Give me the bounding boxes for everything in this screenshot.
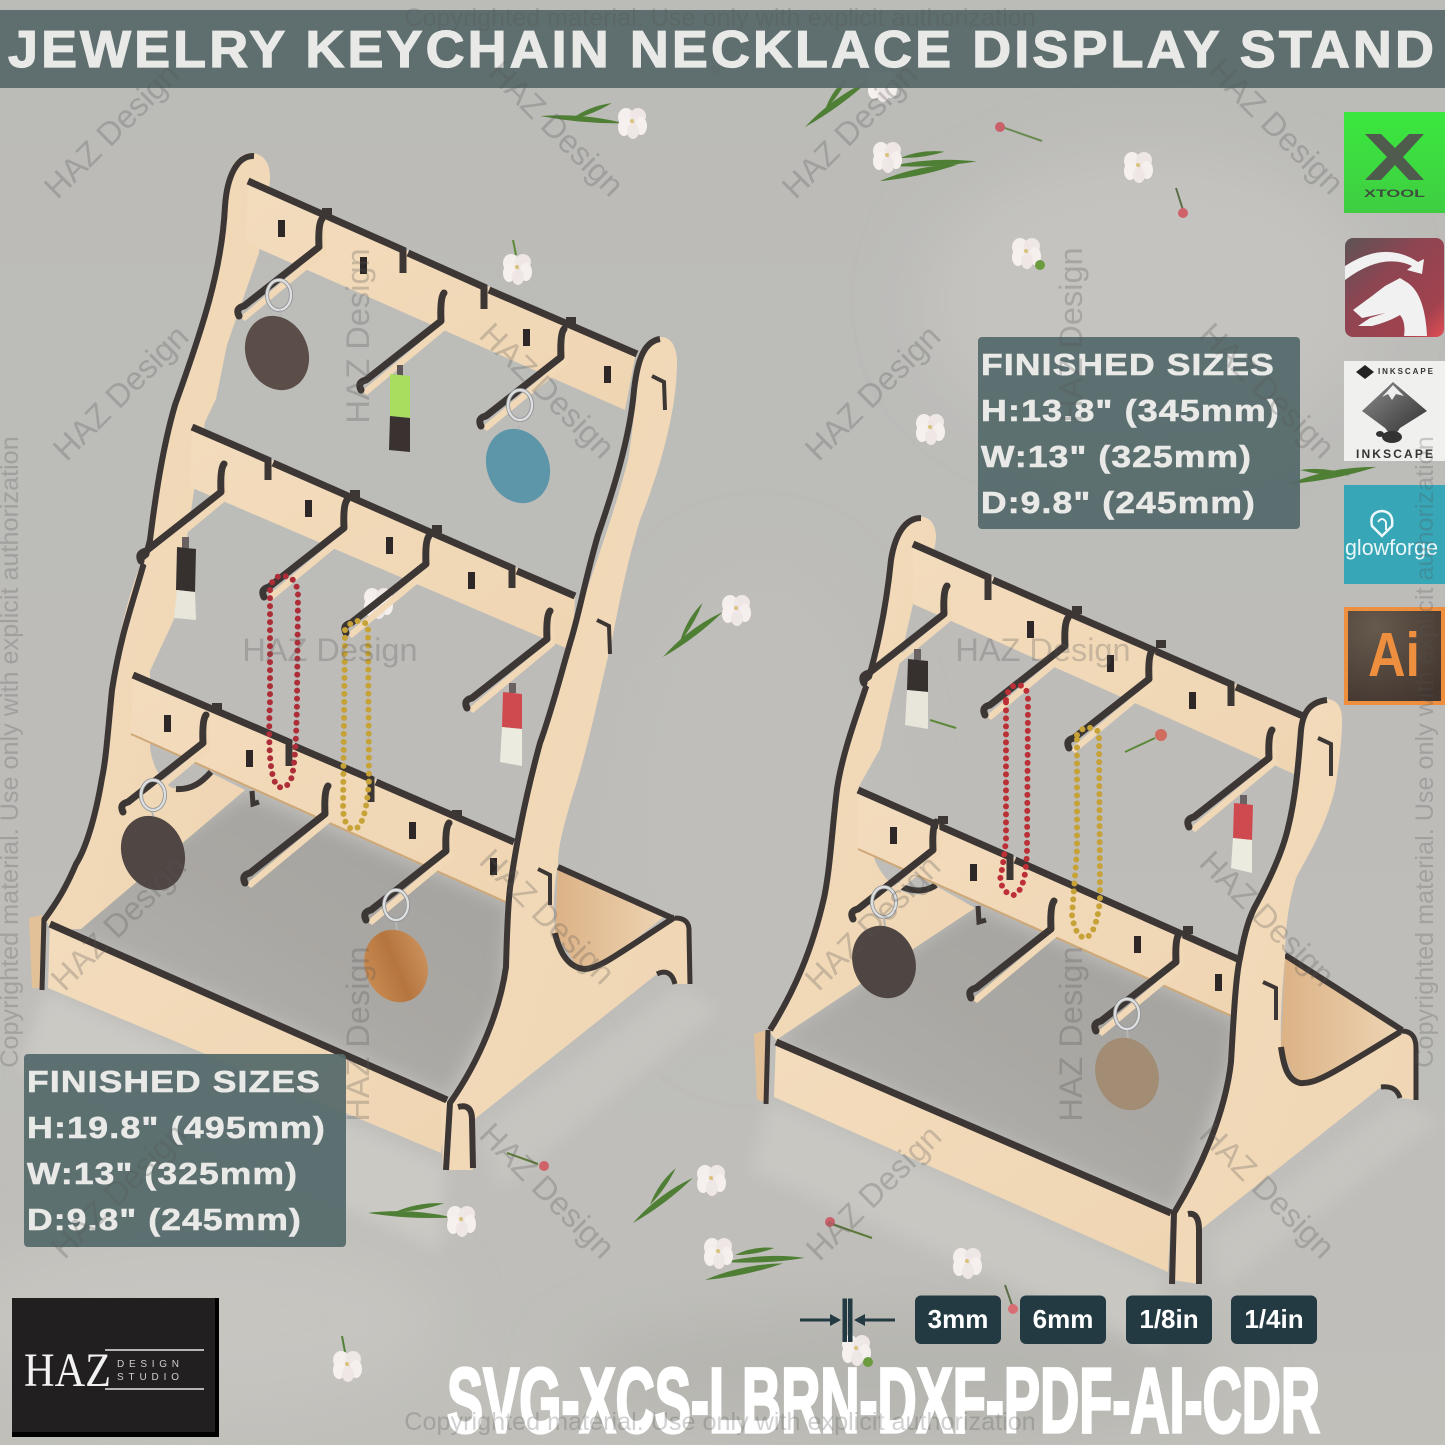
watermarks: HAZ Design bbox=[1193, 316, 1342, 465]
red and cream keychain bbox=[500, 683, 522, 766]
black and cream keychain bbox=[174, 537, 196, 620]
watermarks bbox=[37, 52, 1351, 1267]
thickness badge 6mm: 6mm bbox=[1033, 1304, 1093, 1334]
gold bead necklace bbox=[1072, 728, 1100, 938]
red bead necklace bbox=[269, 576, 298, 788]
logo: xTool: XTOOL bbox=[1364, 188, 1425, 200]
logo: HAZ Design Studio bbox=[12, 1298, 219, 1437]
copyright notices: Copyrighted material. Use only with explicit authorization bbox=[1411, 436, 1439, 1068]
lower tier hooks bbox=[852, 821, 1184, 1036]
watermarks: HAZ Design bbox=[955, 632, 1131, 668]
copyright notices: Copyrighted material. Use only with explicit authorization bbox=[404, 4, 1036, 32]
round pale wood keychain bbox=[1084, 999, 1170, 1120]
info box: large stand finished sizes: FINISHED SIZES bbox=[27, 1064, 321, 1099]
watermarks: HAZ Design bbox=[798, 848, 947, 997]
logo: HAZ Design Studio: HAZ bbox=[24, 1344, 111, 1397]
thickness badge 1/4in: 1/4in bbox=[1244, 1304, 1304, 1334]
info box: large stand finished sizes: H:19.8" (495mm) bbox=[27, 1110, 326, 1145]
info box: small stand finished sizes: H:13.8" (345mm) bbox=[981, 393, 1280, 428]
right side panel bbox=[441, 337, 690, 1170]
watermarks: HAZ Design bbox=[473, 842, 622, 991]
bottom crossbar bbox=[131, 673, 514, 903]
thickness badge 3mm: 3mm bbox=[928, 1304, 988, 1334]
round dark keychain bbox=[234, 280, 320, 400]
info box: small stand finished sizes: W:13" (325mm) bbox=[981, 439, 1252, 474]
logo: Glowforge bbox=[1344, 485, 1445, 584]
thickness badge 1/4in bbox=[1231, 1296, 1317, 1344]
copyright notices: Copyrighted material. Use only with explicit authorization bbox=[404, 1408, 1036, 1436]
left side panel bbox=[754, 517, 986, 1104]
watermarks: HAZ Design bbox=[798, 318, 947, 467]
round teal keychain bbox=[475, 390, 561, 513]
middle tier hooks bbox=[140, 463, 555, 713]
small two-tier display stand bbox=[754, 517, 1416, 1284]
info box: large stand finished sizes bbox=[24, 1054, 346, 1247]
watermarks: HAZ Design bbox=[1202, 52, 1351, 201]
logo: Adobe Illustrator bbox=[1346, 609, 1443, 703]
watermarks: HAZ Design bbox=[775, 56, 924, 205]
left side panel bbox=[29, 153, 270, 990]
logo: HAZ Design Studio: DESIGN bbox=[117, 1359, 179, 1370]
watermarks: HAZ Design bbox=[44, 1116, 193, 1265]
scattered flowers and sprigs bbox=[333, 65, 1377, 1382]
black and cream keychain bbox=[905, 649, 928, 729]
right side panel bbox=[1171, 699, 1416, 1284]
back base board bbox=[555, 867, 672, 969]
watermarks: HAZ Design bbox=[1053, 247, 1089, 423]
floor shadows inside stand bases bbox=[50, 795, 1236, 1211]
top crossbar bbox=[913, 542, 1303, 774]
info box: large stand finished sizes: W:13" (325mm) bbox=[27, 1156, 298, 1191]
info box: small stand finished sizes bbox=[978, 337, 1300, 529]
info box: small stand finished sizes: FINISHED SIZES bbox=[981, 347, 1275, 382]
logo: HAZ Design Studio: STUDIO bbox=[117, 1372, 179, 1383]
top tier hooks bbox=[863, 585, 1277, 832]
thickness badge 1/8in bbox=[1126, 1296, 1212, 1344]
watermarks: HAZ Design bbox=[473, 1116, 622, 1265]
large three-tier display stand bbox=[29, 153, 690, 1170]
top crossbar bbox=[246, 180, 637, 410]
gold bead necklace bbox=[343, 621, 369, 829]
green and black keychain bbox=[389, 365, 410, 452]
red and cream keychain bbox=[1231, 795, 1253, 873]
top tier hooks bbox=[238, 218, 569, 431]
watermarks: HAZ Design bbox=[799, 1118, 948, 1267]
red bead necklace bbox=[1000, 685, 1028, 895]
logo: Glowforge: glowforge bbox=[1345, 535, 1438, 560]
watermarks: HAZ Design bbox=[473, 316, 622, 465]
logo: Inkscape bbox=[1344, 361, 1445, 461]
logo: Inkscape: INKSCAPE bbox=[1356, 447, 1433, 461]
info box: small stand finished sizes: D:9.8" (245mm) bbox=[981, 485, 1256, 520]
watermarks: HAZ Design bbox=[340, 248, 376, 424]
back base board bbox=[1281, 955, 1402, 1082]
watermarks: HAZ Design bbox=[46, 318, 195, 467]
thickness badge 3mm bbox=[915, 1296, 1001, 1344]
front base board bbox=[48, 922, 447, 1153]
logo: Adobe Illustrator: Ai bbox=[1368, 621, 1420, 690]
watermarks: HAZ Design bbox=[482, 54, 631, 203]
watermarks: HAZ Design bbox=[242, 632, 418, 668]
info box: large stand finished sizes: D:9.8" (245mm) bbox=[27, 1202, 302, 1237]
thickness badge 6mm bbox=[1020, 1296, 1106, 1344]
logo: Inkscape: INKSCAPE bbox=[1378, 367, 1434, 376]
watermarks: HAZ Design bbox=[1053, 946, 1089, 1122]
thickness badge 1/8in: 1/8in bbox=[1139, 1304, 1199, 1334]
bottom tier hooks bbox=[122, 714, 454, 925]
logo: xTool bbox=[1344, 112, 1445, 213]
watermarks: HAZ Design bbox=[1193, 1116, 1342, 1265]
watermarks: HAZ Design bbox=[1193, 844, 1342, 993]
icon: material thickness arrows bbox=[800, 1298, 895, 1342]
round dark keychain bbox=[841, 887, 927, 1008]
round dark lower keychain bbox=[110, 780, 196, 900]
middle crossbar bbox=[190, 425, 575, 651]
logo: LightBurn dragon bbox=[1345, 238, 1444, 337]
lower crossbar bbox=[858, 788, 1240, 1018]
round wood keychain bbox=[353, 890, 439, 1012]
watermarks: HAZ Design bbox=[37, 56, 186, 205]
title banner: JEWELRY KEYCHAIN NECKLACE DISPLAY STAND bbox=[8, 21, 1437, 79]
watermarks: HAZ Design bbox=[340, 946, 376, 1122]
watermarks: HAZ Design bbox=[44, 848, 193, 997]
front base board bbox=[774, 1040, 1171, 1272]
